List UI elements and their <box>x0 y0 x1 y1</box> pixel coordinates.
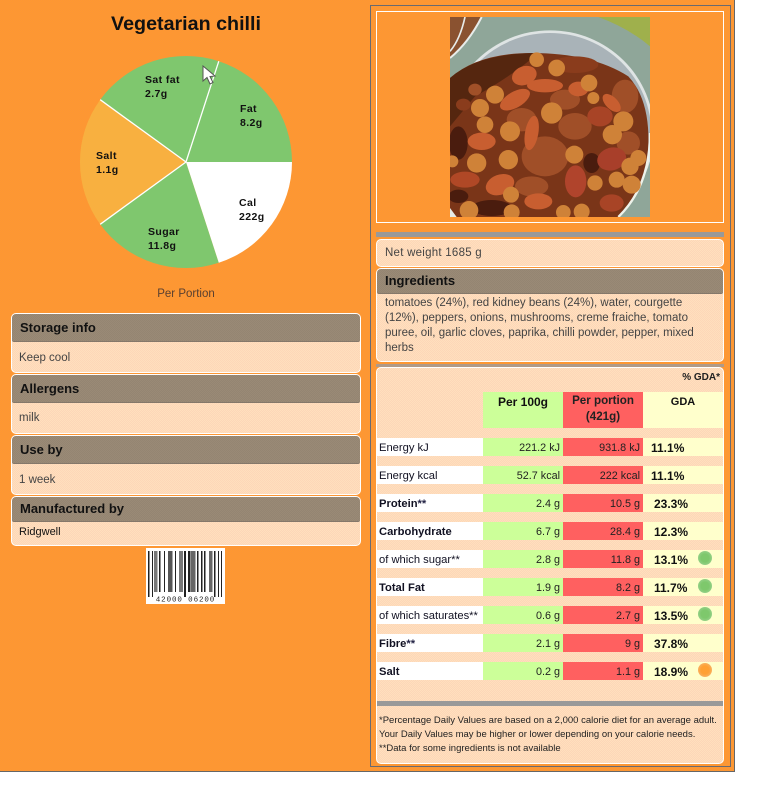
row: salt: Salt <box>379 666 400 678</box>
text: 1 week: 1 week <box>19 474 55 486</box>
row: fibre: 2.1 g <box>536 638 560 650</box>
slice: sat fat: 2.7g <box>145 88 168 100</box>
row: energy kJ <box>377 438 723 456</box>
slice: fat: 8.2g <box>240 117 263 129</box>
row: energy kcal: 52.7 kcal <box>517 470 560 482</box>
slice: salt: 1.1g <box>96 164 119 176</box>
row: total fat <box>377 578 723 596</box>
label: % GDA: % GDA* <box>682 372 720 383</box>
footnotes: **Data for some ingredients is not available <box>379 743 561 754</box>
panel: right column frame <box>370 5 731 767</box>
row: of which sugar: 11.8 g <box>611 554 640 566</box>
row: carbohydrate: 12.3% <box>654 525 688 539</box>
row: energy kcal <box>377 466 723 484</box>
slice: fat <box>186 61 292 162</box>
row: of which saturates: 0.6 g <box>536 610 560 622</box>
row: energy kJ: 931.8 kJ <box>599 442 640 454</box>
row: of which sugar <box>377 550 723 568</box>
row: of which sugar: 2.8 g <box>536 554 560 566</box>
heading: ingredients: Ingredients <box>385 273 455 288</box>
column header: per 100g <box>483 392 563 428</box>
slice: cal <box>186 162 292 263</box>
row: protein <box>377 494 723 512</box>
text: ingredients list: (12%), peppers, onions, mushrooms, creme fraiche, tomato <box>385 312 688 324</box>
column header: per portion <box>563 392 643 428</box>
row: energy kcal: 222 kcal <box>600 470 640 482</box>
column header: GDA <box>643 392 723 428</box>
row: protein: 10.5 g <box>610 498 640 510</box>
row: of which saturates <box>377 606 723 624</box>
icon: mouse cursor <box>202 65 216 85</box>
icon: green traffic light <box>698 579 712 593</box>
panel: net weight <box>376 239 724 267</box>
row: of which saturates: 2.7 g <box>616 610 640 622</box>
panel: storage info <box>11 313 361 373</box>
row: fibre: 37.8% <box>654 637 688 651</box>
slice: cal: 222g <box>239 211 265 223</box>
row: total fat: 1.9 g <box>536 582 560 594</box>
slice: salt: Salt <box>96 150 117 162</box>
pie chart <box>80 56 292 268</box>
panel: use by <box>11 435 361 495</box>
panel: ingredients <box>376 268 724 362</box>
row: fibre <box>377 634 723 652</box>
icon: green traffic light <box>698 607 712 621</box>
slice: cal: Cal <box>239 197 257 209</box>
divider bar <box>377 701 723 706</box>
heading: storage info <box>12 314 360 342</box>
row: energy kJ: 221.2 kJ <box>519 442 560 454</box>
row: fibre: Fibre** <box>379 638 415 650</box>
row: salt: 0.2 g <box>536 666 560 678</box>
slice: sat fat: Sat fat <box>145 74 180 86</box>
row: fibre: 9 g <box>625 638 640 650</box>
row: total fat: 11.7% <box>654 581 687 595</box>
row: total fat: 8.2 g <box>616 582 640 594</box>
row: carbohydrate <box>377 522 723 540</box>
heading: storage info: Storage info <box>20 320 96 335</box>
row: carbohydrate: 6.7 g <box>536 526 560 538</box>
heading: allergens <box>12 375 360 403</box>
row: of which sugar: of which sugar** <box>379 554 460 566</box>
icon: orange traffic light <box>698 663 712 677</box>
divider bar <box>376 232 724 237</box>
photo frame <box>376 11 724 223</box>
footnotes: Your Daily Values may be higher or lower depending on your calorie needs. <box>379 729 695 740</box>
slice: sugar: Sugar <box>148 226 180 238</box>
slice: fat: Fat <box>240 103 257 115</box>
row: carbohydrate: 28.4 g <box>610 526 640 538</box>
column header: per portion: Per portion <box>572 394 634 407</box>
photo: bowl of vegetarian chilli <box>450 17 650 217</box>
panel: allergens <box>11 374 361 434</box>
row: protein: 23.3% <box>654 497 688 511</box>
slice: salt <box>80 100 186 224</box>
text: ingredients list <box>385 297 694 354</box>
footnotes: *Percentage Daily Values are based on a 2,000 calorie diet for an average adult. <box>379 715 717 726</box>
pie caption: Per Portion <box>157 288 215 300</box>
row: of which saturates: 13.5% <box>654 609 688 623</box>
row: salt <box>377 662 723 680</box>
heading: ingredients <box>377 269 723 294</box>
text: ridgwell: Ridgwell <box>19 526 61 538</box>
heading: manufactured by <box>12 497 360 522</box>
column header: per portion: (421g) <box>586 410 620 423</box>
text: ingredients list: herbs <box>385 342 414 354</box>
heading: allergens: Allergens <box>20 381 79 396</box>
text: net weight: Net weight 1685 g <box>385 247 482 259</box>
heading: use by <box>12 436 360 464</box>
footnotes <box>379 715 717 754</box>
row: protein: 2.4 g <box>536 498 560 510</box>
column header: per 100g: Per 100g <box>498 395 548 409</box>
icon: green traffic light <box>698 551 712 565</box>
row: of which saturates: of which saturates** <box>379 610 478 622</box>
row: energy kJ: 11.1% <box>651 441 684 455</box>
text: ingredients list: tomatoes (24%), red kidney beans (24%), water, courgette <box>385 297 682 309</box>
row: energy kcal: Energy kcal <box>379 470 437 482</box>
row: of which sugar: 13.1% <box>654 553 688 567</box>
barcode <box>146 548 225 604</box>
slice: sugar: 11.8g <box>148 240 176 252</box>
title: Vegetarian chilli <box>111 13 261 35</box>
column header: GDA: GDA <box>671 396 695 408</box>
heading: manufactured by: Manufactured by <box>20 501 124 516</box>
row: total fat: Total Fat <box>379 582 425 594</box>
text: keep cool: Keep cool <box>19 352 70 364</box>
slice: sat fat <box>100 56 219 162</box>
row: protein: Protein** <box>379 498 426 510</box>
panel: manufactured by <box>11 496 361 546</box>
row: salt: 18.9% <box>654 665 688 679</box>
slice: sugar <box>100 162 219 268</box>
row: energy kcal: 11.1% <box>651 469 684 483</box>
row: salt: 1.1 g <box>616 666 640 678</box>
row: energy kJ: Energy kJ <box>379 442 429 454</box>
text: milk: milk <box>19 412 39 424</box>
text: ingredients list: puree, oil, garlic cloves, paprika, chilli powder, pepper, mixed <box>385 327 694 339</box>
divider bar <box>376 364 724 367</box>
heading: use by: Use by <box>20 442 63 457</box>
panel: nutrition table <box>376 367 724 764</box>
row: carbohydrate: Carbohydrate <box>379 526 452 538</box>
